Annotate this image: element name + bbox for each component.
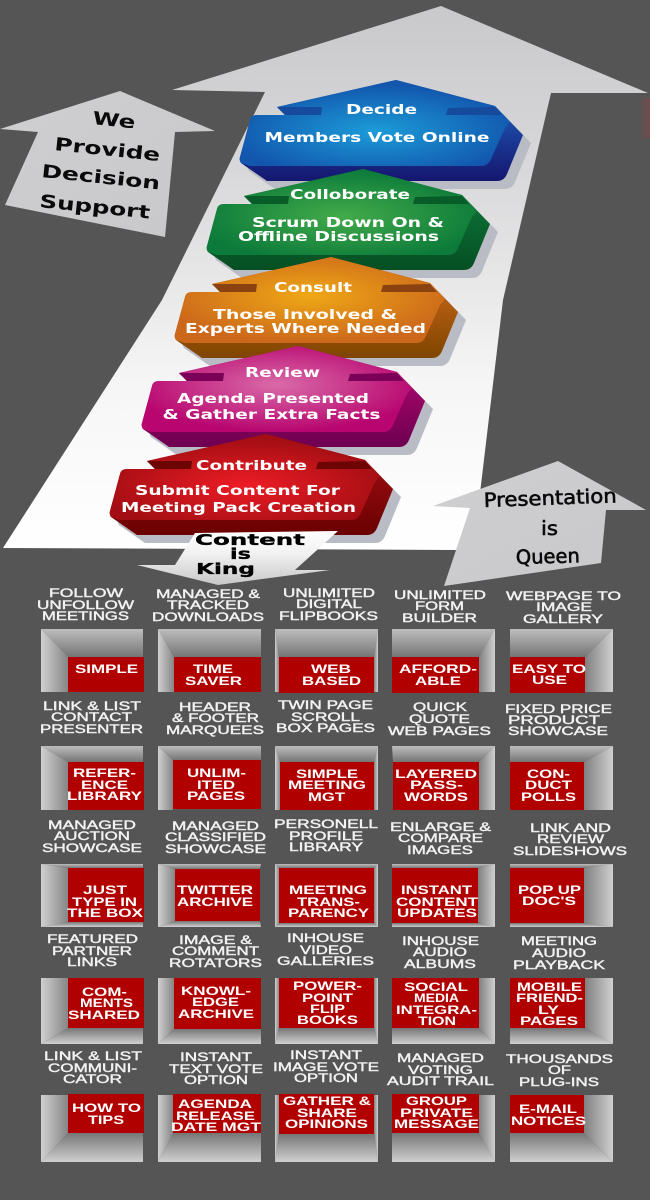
- grid row 1: [37, 586, 621, 693]
- caption: Unlimited Digital Flipbooks: FLIPBOOKS: [279, 609, 378, 623]
- tile: Social Media Integration: MEDIA: [414, 991, 459, 1005]
- tile: Simple Meeting Mgt: [275, 746, 378, 810]
- caption: Inhouse Audio Albums: ALBUMS: [404, 957, 476, 971]
- tile: Gather & Share Opinions: [275, 1094, 378, 1162]
- block: Review: Review: [245, 365, 320, 381]
- caption: Meeting Audio Playback: [513, 934, 605, 972]
- caption: Enlarge & Compare Images: ENLARGE &: [390, 820, 491, 834]
- tile: Layered Passwords: LAYERED: [395, 767, 477, 781]
- tile: Social Media Integration: SOCIAL: [404, 980, 469, 994]
- grid row 4: [41, 931, 613, 1044]
- caption: Thousands of Plug-ins: THOUSANDS: [506, 1052, 613, 1066]
- caption: Meeting Audio Playback: AUDIO: [532, 946, 586, 960]
- caption: Managed & Tracked Downloads: DOWNLOADS: [152, 610, 264, 624]
- caption: Link & List Communicator: CATOR: [63, 1072, 122, 1086]
- caption: Link and Review Slideshows: [513, 821, 627, 858]
- caption: Link & List Communicator: COMMUNI-: [48, 1061, 137, 1075]
- caption: Featured Partner Links: LINKS: [67, 955, 117, 969]
- tile: Unlimited Pages: UNLIM-: [187, 766, 246, 780]
- tile: Mobile Friendly Pages: [510, 978, 613, 1044]
- tile: Unlimited Pages: ITED: [197, 778, 235, 792]
- caption: Fixed Price Product Showcase: FIXED PRICE: [505, 702, 612, 716]
- caption: Instant Text Vote Option: OPTION: [184, 1073, 248, 1087]
- tile: Conduct Polls: POLLS: [521, 790, 576, 804]
- tile: Knowledge Archive: EDGE: [192, 995, 239, 1009]
- block: Contribute: Submit Content For: [135, 483, 340, 499]
- block: Consult: [175, 257, 466, 366]
- tile: E-mail Notices: NOTICES: [511, 1114, 586, 1128]
- text: Presentation is Queen: [483, 484, 617, 569]
- tile: Pop Up Doc's: POP UP: [518, 883, 581, 897]
- tile: Affordable: [392, 629, 495, 693]
- tile: Layered Passwords: [392, 746, 495, 810]
- text: Content is King: [195, 531, 306, 578]
- tile: How to Tips: HOW TO: [72, 1101, 141, 1115]
- caption: Personell Profile Library: [274, 817, 378, 854]
- caption: Managed & Tracked Downloads: TRACKED: [167, 598, 249, 612]
- tile: Knowledge Archive: [158, 978, 261, 1044]
- caption: Managed Auction Showcase: MANAGED: [48, 818, 136, 832]
- tile: Layered Passwords: PASS-: [410, 778, 463, 792]
- tile: Web Based: BASED: [302, 674, 361, 688]
- caption: Personell Profile Library: PERSONELL: [274, 817, 378, 831]
- tile: Time Saver: [158, 629, 261, 692]
- caption: Meeting Audio Playback: MEETING: [521, 934, 597, 948]
- tile: Unlimited Pages: PAGES: [187, 789, 245, 803]
- caption: Webpage to Image Gallery: [506, 589, 621, 626]
- tile: Meeting Transparency: [275, 864, 378, 927]
- tile: Easy to Use: [510, 629, 613, 693]
- text: We Provide Decision Support: Support: [38, 191, 152, 224]
- caption: Inhouse Video Galleries: GALLERIES: [277, 954, 374, 968]
- caption: Link and Review Slideshows: SLIDESHOWS: [513, 844, 627, 858]
- tile: E-mail Notices: E-MAIL: [519, 1102, 578, 1116]
- tile: How to Tips: TIPS: [88, 1113, 124, 1127]
- tile: Web Based: WEB: [311, 662, 351, 676]
- caption: Managed Auction Showcase: AUCTION: [54, 829, 130, 843]
- text: We Provide Decision Support: Decision: [40, 161, 161, 194]
- caption: Twin Page Scroll Box Pages: BOX PAGES: [276, 721, 375, 735]
- text: Presentation is Queen: is: [541, 517, 558, 540]
- tile: Agenda Release Date Mgt: [158, 1094, 262, 1162]
- tile: Instant Content Updates: CONTENT: [396, 895, 479, 909]
- caption: Inhouse Audio Albums: [402, 934, 479, 971]
- caption: Image & Comment Rotators: ROTATORS: [169, 956, 262, 970]
- tile: Reference Library: ENCE: [81, 778, 128, 792]
- text: We Provide Decision Support: Provide: [53, 134, 161, 166]
- caption: Link and Review Slideshows: LINK AND: [530, 821, 611, 835]
- tile: Affordable: ABLE: [415, 674, 461, 688]
- tile: Instant Content Updates: [392, 864, 495, 927]
- caption: Fixed Price Product Showcase: SHOWCASE: [508, 724, 608, 738]
- block: Review: & Gather Extra Facts: [162, 407, 380, 423]
- tile: Affordable: AFFORD-: [399, 662, 477, 676]
- caption: Enlarge & Compare Images: [390, 820, 491, 857]
- caption: Link & List Contact Presenter: LINK & LIST: [43, 699, 142, 713]
- tile: Web Based: [275, 629, 378, 693]
- tile: Social Media Integration: INTEGRA-: [396, 1003, 477, 1017]
- tile: Conduct Polls: DUCT: [525, 778, 573, 792]
- caption: Quick Quote Web Pages: QUICK: [413, 700, 467, 714]
- tile: PowerPoint Flip Books: FLIP: [310, 1002, 345, 1016]
- tile: Conduct Polls: [510, 746, 613, 810]
- block: Colloborate: Offline Discussions: [238, 229, 439, 245]
- caption: Managed Voting Audit Trail: [387, 1051, 494, 1088]
- caption: Twin Page Scroll Box Pages: TWIN PAGE: [278, 698, 373, 712]
- tile: Gather & Share Opinions: SHARE: [297, 1106, 357, 1120]
- caption: Header & Footer Marquees: [166, 700, 264, 737]
- block: Consult: Consult: [274, 280, 353, 296]
- text: We Provide Decision Support: We: [91, 108, 136, 133]
- tile: Mobile Friendly Pages: PAGES: [520, 1014, 578, 1028]
- caption: Inhouse Video Galleries: VIDEO: [300, 943, 352, 957]
- block: Consult: Those Involved &: [213, 307, 397, 323]
- caption: Link & List Contact Presenter: [40, 699, 143, 736]
- grid row 2: [40, 698, 613, 810]
- caption: Webpage to Image Gallery: GALLERY: [523, 612, 603, 626]
- caption: Managed Classified Showcase: CLASSIFIED: [165, 830, 266, 844]
- block: Colloborate: [207, 169, 498, 278]
- caption: Managed & Tracked Downloads: MANAGED &: [156, 587, 260, 601]
- caption: Managed Voting Audit Trail: VOTING: [408, 1063, 473, 1077]
- tile: E-mail Notices: [510, 1095, 613, 1162]
- tile: Comments Shared: SHARED: [68, 1008, 140, 1022]
- tile: Twitter Archive: TWITTER: [177, 883, 253, 897]
- tile: Easy to Use: EASY TO: [512, 662, 586, 676]
- tile: Agenda Release Date Mgt: DATE MGT: [171, 1120, 262, 1134]
- tile: Twitter Archive: [158, 864, 261, 927]
- block: Contribute: Contribute: [196, 458, 307, 474]
- caption: Image & Comment Rotators: [169, 933, 262, 970]
- tile: Time Saver: SAVER: [185, 674, 242, 688]
- caption: Webpage to Image Gallery: WEBPAGE TO: [506, 589, 621, 603]
- text: Presentation is Queen: Queen: [516, 544, 580, 569]
- tile: Layered Passwords: WORDS: [404, 790, 468, 804]
- caption: Thousands of Plug-ins: PLUG-INS: [519, 1075, 599, 1089]
- caption: Enlarge & Compare Images: COMPARE: [398, 831, 483, 845]
- tile: Social Media Integration: [392, 978, 495, 1044]
- caption: Meeting Audio Playback: PLAYBACK: [513, 958, 605, 972]
- arrow: Presentation is Queen: [433, 461, 646, 586]
- caption: Instant Image Vote Option: OPTION: [294, 1071, 358, 1085]
- caption: Thousands of Plug-ins: OF: [548, 1063, 571, 1077]
- tile: Instant Content Updates: INSTANT: [401, 883, 473, 897]
- caption: Inhouse Audio Albums: INHOUSE: [402, 934, 479, 948]
- tile: Knowledge Archive: KNOWL-: [181, 984, 251, 998]
- block: Review: Agenda Presented: [177, 391, 369, 407]
- caption: Follow Unfollow Meetings: [37, 586, 135, 623]
- tile: Agenda Release Date Mgt: RELEASE: [176, 1109, 255, 1123]
- tile: Reference Library: REFER-: [73, 766, 136, 780]
- tile: Group Private Message: [392, 1094, 495, 1162]
- caption: Twin Page Scroll Box Pages: SCROLL: [291, 710, 360, 724]
- caption: Instant Image Vote Option: IMAGE VOTE: [273, 1060, 379, 1074]
- tile: Gather & Share Opinions: OPINIONS: [285, 1117, 368, 1131]
- tile: Pop Up Doc's: DOC'S: [522, 894, 576, 908]
- block: Decide: Members Vote Online: [264, 130, 490, 146]
- text: Presentation is Queen: Presentation: [483, 484, 617, 512]
- tile: Comments Shared: COM-: [82, 985, 127, 999]
- tile: Simple Meeting Mgt: SIMPLE: [296, 767, 358, 781]
- caption: Header & Footer Marquees: HEADER: [179, 700, 251, 714]
- tile: Group Private Message: GROUP: [406, 1094, 467, 1108]
- tile: Conduct Polls: CON-: [527, 767, 570, 781]
- caption: Instant Image Vote Option: [273, 1048, 379, 1085]
- tile: PowerPoint Flip Books: BOOKS: [297, 1013, 358, 1027]
- caption: Unlimited Form Builder: UNLIMITED: [394, 588, 486, 602]
- tile: Meeting Transparency: TRANS-: [297, 895, 360, 909]
- block: Decide: Decide: [346, 102, 417, 118]
- tile: Knowledge Archive: ARCHIVE: [178, 1007, 254, 1021]
- tile: Mobile Friendly Pages: MOBILE: [517, 980, 582, 994]
- caption: Fixed Price Product Showcase: [505, 702, 612, 738]
- caption: Link and Review Slideshows: REVIEW: [537, 832, 605, 846]
- caption: Personell Profile Library: LIBRARY: [289, 840, 363, 854]
- caption: Featured Partner Links: FEATURED: [47, 932, 138, 946]
- caption: Managed Voting Audit Trail: MANAGED: [397, 1051, 484, 1065]
- caption: Header & Footer Marquees: MARQUEES: [166, 723, 264, 737]
- tile: Simple: [41, 629, 144, 692]
- caption: Instant Text Vote Option: INSTANT: [180, 1050, 253, 1064]
- tile: Time Saver: TIME: [193, 662, 233, 676]
- block: Colloborate: Scrum Down On &: [252, 215, 444, 231]
- caption: Unlimited Digital Flipbooks: UNLIMITED: [283, 586, 375, 600]
- caption: Quick Quote Web Pages: QUOTE: [409, 712, 470, 726]
- caption: Thousands of Plug-ins: [506, 1052, 613, 1089]
- caption: Managed Classified Showcase: [165, 819, 266, 856]
- caption: Fixed Price Product Showcase: PRODUCT: [508, 713, 601, 727]
- caption: Unlimited Form Builder: BUILDER: [402, 611, 477, 625]
- caption: Instant Text Vote Option: TEXT VOTE: [169, 1062, 263, 1076]
- tile: Just Type in the Box: [41, 864, 144, 927]
- caption: Inhouse Audio Albums: AUDIO: [413, 945, 467, 959]
- caption: Managed Auction Showcase: [42, 818, 142, 855]
- grid row 3: [41, 817, 627, 927]
- caption: Link & List Communicator: [44, 1049, 143, 1086]
- caption: Link & List Communicator: LINK & LIST: [44, 1049, 143, 1063]
- tile: Easy to Use: USE: [532, 673, 567, 687]
- tile: Mobile Friendly Pages: LY: [538, 1003, 559, 1017]
- caption: Quick Quote Web Pages: [388, 700, 491, 738]
- caption: Follow Unfollow Meetings: MEETINGS: [42, 609, 129, 623]
- tile: Mobile Friendly Pages: FRIEND-: [516, 991, 583, 1005]
- tile: Twitter Archive: ARCHIVE: [177, 895, 253, 909]
- tile: Unlimited Pages: [158, 746, 261, 810]
- tile: Just Type in the Box: THE BOX: [67, 906, 144, 920]
- caption: Inhouse Video Galleries: INHOUSE: [287, 931, 364, 945]
- grid row 5: [41, 1048, 613, 1162]
- caption: Unlimited Form Builder: [394, 588, 486, 625]
- block: Consult: Experts Where Needed: [185, 321, 426, 337]
- caption: Twin Page Scroll Box Pages: [276, 698, 375, 735]
- block: Decide: [240, 80, 531, 189]
- caption: Managed Voting Audit Trail: AUDIT TRAIL: [387, 1074, 494, 1088]
- caption: Follow Unfollow Meetings: UNFOLLOW: [37, 598, 135, 612]
- caption: Webpage to Image Gallery: IMAGE: [536, 600, 592, 614]
- text: Content is King: is: [230, 545, 251, 563]
- text: We Provide Decision Support: [38, 108, 161, 224]
- tile: Group Private Message: PRIVATE: [400, 1106, 473, 1120]
- tile: Just Type in the Box: TYPE IN: [72, 895, 137, 909]
- tile: Social Media Integration: TION: [418, 1014, 456, 1028]
- arrow: We Provide Decision Support: [0, 91, 215, 237]
- tile: Reference Library: LIBRARY: [67, 789, 142, 803]
- tile: Pop Up Doc's: [510, 864, 613, 927]
- block: Review: [142, 346, 433, 455]
- caption: Image & Comment Rotators: IMAGE &: [179, 933, 252, 947]
- tile: Group Private Message: MESSAGE: [394, 1117, 479, 1131]
- tile: PowerPoint Flip Books: POINT: [302, 991, 354, 1005]
- caption: Unlimited Digital Flipbooks: DIGITAL: [296, 597, 362, 611]
- tile: Reference Library: [41, 746, 144, 810]
- text: Content is King: King: [196, 560, 255, 578]
- main upward arrow: [3, 6, 648, 550]
- caption: Enlarge & Compare Images: IMAGES: [407, 843, 473, 857]
- tile: Instant Content Updates: UPDATES: [397, 906, 477, 920]
- tile: Gather & Share Opinions: GATHER &: [283, 1094, 371, 1108]
- caption: Featured Partner Links: PARTNER: [52, 944, 132, 958]
- caption: Managed Auction Showcase: SHOWCASE: [42, 841, 142, 855]
- caption: Header & Footer Marquees: & FOOTER: [172, 711, 259, 725]
- tile: Comments Shared: MENTS: [80, 996, 133, 1010]
- caption: Managed Classified Showcase: MANAGED: [172, 819, 259, 833]
- tile: Meeting Transparency: MEETING: [289, 883, 367, 897]
- block: Contribute: [110, 434, 401, 543]
- caption: Managed & Tracked Downloads: [152, 587, 264, 624]
- caption: Image & Comment Rotators: COMMENT: [172, 944, 260, 958]
- caption: Instant Text Vote Option: [169, 1050, 263, 1087]
- tile: Simple: SIMPLE: [75, 662, 138, 676]
- tile: Meeting Transparency: PARENCY: [288, 906, 369, 920]
- tile: Simple Meeting Mgt: MEETING: [288, 778, 366, 792]
- caption: Instant Image Vote Option: INSTANT: [290, 1048, 363, 1062]
- caption: Featured Partner Links: [47, 932, 138, 969]
- tile: Just Type in the Box: JUST: [83, 883, 128, 897]
- caption: Follow Unfollow Meetings: FOLLOW: [49, 586, 124, 600]
- tile: How to Tips: [41, 1094, 144, 1162]
- tile: PowerPoint Flip Books: POWER-: [293, 979, 362, 993]
- caption: Personell Profile Library: PROFILE: [289, 829, 363, 843]
- arrow: Content is King: [137, 531, 338, 585]
- caption: Unlimited Digital Flipbooks: [279, 586, 378, 623]
- caption: Managed Classified Showcase: SHOWCASE: [165, 842, 266, 856]
- tile: Comments Shared: [41, 978, 144, 1044]
- tile: PowerPoint Flip Books: [275, 978, 378, 1044]
- tile: Agenda Release Date Mgt: AGENDA: [178, 1097, 252, 1111]
- block: Contribute: Meeting Pack Creation: [121, 500, 356, 516]
- caption: Unlimited Form Builder: FORM: [415, 599, 464, 613]
- caption: Link & List Contact Presenter: CONTACT: [51, 710, 133, 724]
- tile: Simple Meeting Mgt: MGT: [308, 790, 346, 804]
- caption: Link & List Contact Presenter: PRESENTER: [40, 722, 143, 736]
- text: Content is King: Content: [195, 531, 306, 549]
- block: Colloborate: Colloborate: [290, 187, 410, 203]
- caption: Quick Quote Web Pages: WEB PAGES: [388, 724, 491, 738]
- caption: Inhouse Video Galleries: [277, 931, 374, 968]
